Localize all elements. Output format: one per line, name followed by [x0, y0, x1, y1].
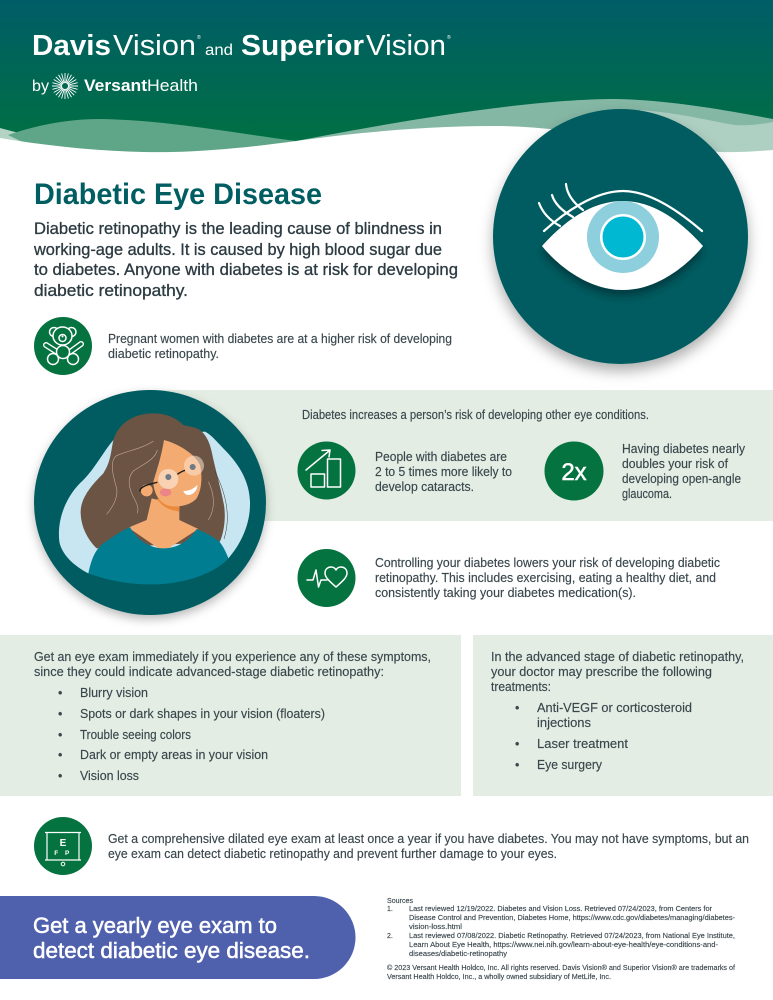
panel: treatments: injections — [537, 716, 591, 730]
panel: treatments — [473, 635, 773, 796]
logo: Davis Vision and Superior Vision — [32, 30, 451, 62]
yearly exam text: Get a comprehensive dilated eye exam at least once a year if you have diabetes. You may not have symptoms, but an — [108, 832, 749, 846]
panel: symptoms: • — [58, 707, 62, 721]
sources and copyright: © 2023 Versant Health Holdco, Inc. All rights reserved. Davis Vision® and Superior Vision® are trademarks of — [387, 964, 735, 972]
panel: treatments: treatments: — [491, 680, 551, 694]
glaucoma text: glaucoma. — [622, 487, 672, 501]
icon: 2x — [544, 442, 604, 500]
control diabetes text: consistently taking your diabetes medication(s). — [375, 586, 636, 600]
panel: symptoms: Vision loss — [80, 769, 139, 783]
panel: treatments: Eye surgery — [537, 758, 603, 772]
intro text — [33, 220, 458, 300]
yearly exam text: eye exam can detect diabetic retinopathy and prevent further damage to your eyes. — [108, 847, 557, 861]
logo: by Versant Health: by — [32, 78, 49, 95]
logo: Davis Vision and Superior Vision: Superior — [241, 30, 364, 62]
panel: symptoms: Blurry vision — [80, 686, 148, 700]
sources and copyright: Sources — [387, 898, 413, 905]
icon: sunburst — [52, 73, 78, 99]
logo: by Versant Health — [32, 73, 198, 99]
panel: treatments: • — [515, 737, 519, 751]
logo: Davis Vision and Superior Vision: Vision — [113, 30, 196, 62]
sources and copyright: 2. — [387, 933, 393, 940]
intro text: Diabetic retinopathy is the leading cause of blindness in — [34, 220, 442, 238]
callout: get a yearly eye exam: Get a yearly eye exam to — [33, 913, 277, 938]
pregnancy risk text: Pregnant women with diabetes are at a higher risk of developing — [108, 332, 452, 346]
panel: treatments: In the advanced stage of diabetic retinopathy, — [491, 650, 744, 664]
icon: eye chart: F P — [54, 850, 72, 857]
pregnancy risk text — [108, 332, 452, 361]
intro text: diabetic retinopathy. — [34, 282, 188, 300]
panel: symptoms: • — [58, 728, 62, 742]
icon: 2x: 2x — [561, 459, 587, 486]
logo: by Versant Health: Health — [147, 77, 198, 95]
panel: symptoms: Get an eye exam immediately if you experience any of these symptoms, — [34, 650, 431, 664]
callout: get a yearly eye exam — [0, 896, 356, 979]
control diabetes text — [375, 556, 720, 600]
intro text: to diabetes. Anyone with diabetes is at risk for developing — [34, 261, 458, 279]
logo: Davis Vision and Superior Vision: ® — [447, 34, 451, 41]
glaucoma text — [622, 442, 746, 501]
panel: treatments: Laser treatment — [537, 737, 629, 751]
callout: get a yearly eye exam: detect diabetic eye disease. — [33, 938, 310, 963]
cataracts text — [375, 450, 512, 494]
panel: symptoms: since they could indicate advanced-stage diabetic retinopathy: — [34, 665, 384, 679]
logo: Davis Vision and Superior Vision: Vision — [366, 30, 446, 62]
panel: symptoms — [0, 635, 461, 796]
sources and copyright: Versant Health Holdco, Inc., a wholly owned subsidiary of MetLife, Inc. — [387, 974, 611, 981]
panel: symptoms: Dark or empty areas in your vision — [80, 748, 268, 762]
header banner with waves — [0, 0, 773, 175]
glaucoma text: developing open-angle — [622, 472, 741, 486]
sources and copyright: Last reviewed 07/08/2022. Diabetic Retinopathy. Retrieved 07/24/2023, from National Eye Institute, — [409, 933, 735, 940]
sources and copyright: diseases/diabetic-retinopathy — [409, 951, 508, 958]
panel: treatments: your doctor may prescribe the following — [491, 665, 712, 679]
panel: symptoms: Trouble seeing colors — [80, 728, 191, 742]
sources and copyright: Last reviewed 12/19/2022. Diabetes and Vision Loss. Retrieved 07/24/2023, from Centers for — [409, 906, 713, 913]
yearly exam text — [108, 832, 749, 861]
sources and copyright: 1. — [387, 906, 393, 913]
control diabetes text: retinopathy. This includes exercising, eating a healthy diet, and — [375, 571, 716, 585]
icon: eye chart: E — [60, 838, 67, 849]
panel: symptoms: • — [58, 748, 62, 762]
control diabetes text: Controlling your diabetes lowers your risk of developing diabetic — [375, 556, 720, 570]
panel: other eye conditions — [150, 390, 773, 521]
title: Diabetic Eye Disease — [34, 178, 322, 211]
sources and copyright — [387, 898, 736, 981]
panel: treatments: Anti-VEGF or corticosteroid — [537, 701, 692, 715]
icon: rising chart — [298, 442, 356, 500]
cataracts text: 2 to 5 times more likely to — [375, 465, 512, 479]
icon: teddy bear — [34, 317, 92, 375]
icon: heart with pulse — [298, 549, 356, 607]
sources and copyright: Learn About Eye Health, https://www.nei.nih.gov/learn-about-eye-health/eye-conditions-and- — [409, 942, 719, 949]
panel: symptoms: Spots or dark shapes in your vision (floaters) — [80, 707, 325, 721]
logo: Davis Vision and Superior Vision: and — [205, 42, 233, 59]
glaucoma text: Having diabetes nearly — [622, 442, 746, 456]
panel: symptoms: • — [58, 686, 62, 700]
cataracts text: develop cataracts. — [375, 480, 474, 494]
logo: Davis Vision and Superior Vision: ® — [197, 34, 201, 41]
logo: Davis Vision and Superior Vision: Davis — [32, 30, 111, 62]
cataracts text: People with diabetes are — [375, 450, 507, 464]
icon: eye chart — [34, 817, 92, 875]
icon: large eye in circle — [493, 109, 748, 364]
pregnancy risk text: diabetic retinopathy. — [108, 347, 219, 361]
panel: treatments: • — [515, 758, 519, 772]
logo: by Versant Health: Versant — [84, 77, 148, 95]
illustration: woman with glasses — [34, 390, 266, 615]
sources and copyright: vision-loss.html — [409, 924, 462, 931]
heading: other eye conditions: Diabetes increases a person’s risk of developing other eye conditions. — [302, 408, 649, 422]
panel: symptoms: • — [58, 769, 62, 783]
panel: treatments: • — [515, 701, 519, 715]
glaucoma text: doubles your risk of — [622, 457, 729, 471]
sources and copyright: Disease Control and Prevention, Diabetes Home, https://www.cdc.gov/diabetes/managing/diabetes- — [409, 915, 736, 922]
intro text: working-age adults. It is caused by high blood sugar due — [33, 241, 442, 259]
